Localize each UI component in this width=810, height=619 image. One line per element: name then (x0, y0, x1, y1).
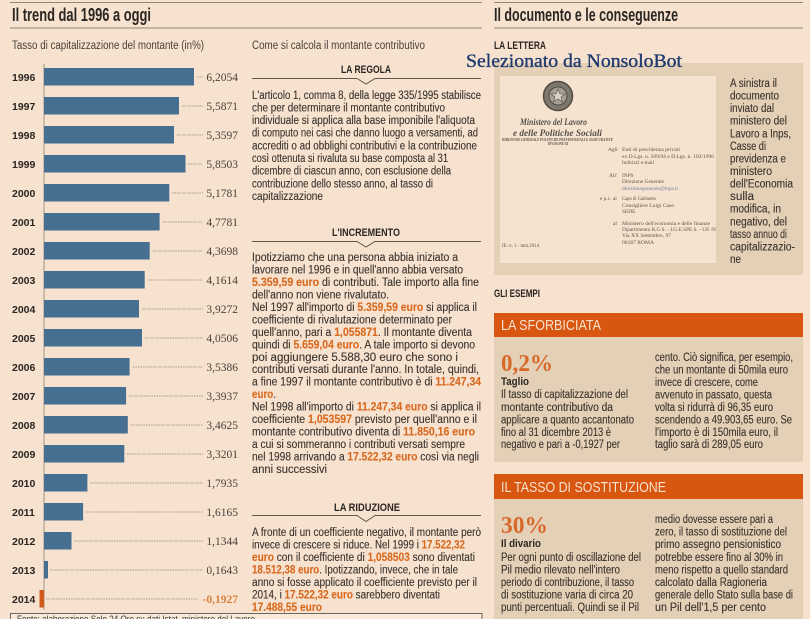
text: l'incremento: lavorare nel 1996 e in quell'anno abbia versato (252, 264, 463, 276)
addressees: IE: n. 1 - mm.2014 (502, 243, 539, 249)
bar 2010 (12, 474, 238, 492)
text: column 1 (501, 552, 641, 614)
addressees: Consigliere Luigi Caso (622, 203, 674, 209)
text: la riduzione: invece di crescere si riduce. Nel 1999 i 17.522,32 (252, 540, 465, 552)
number: 0,2%: 0,2% (501, 351, 553, 377)
bar 2012: 1,1344 (206, 536, 238, 548)
section: la riduzione (252, 502, 481, 614)
bar 2004 (12, 300, 238, 318)
text: la riduzione: 18.512,38 euro. Ipotizzando, invece, che in tale (252, 564, 458, 576)
text: letter caption: negativo, del (730, 216, 787, 228)
addressees: Via XX Settembre, 97 (622, 233, 671, 239)
text: letter caption (730, 78, 795, 266)
bar 1996: 6,2054 (206, 72, 238, 84)
addressees: e p.c. al (600, 196, 617, 202)
panel: il tasso di sostituzione (494, 474, 803, 619)
text: column 1: negativo e pari a -0,1927 per (501, 439, 620, 451)
text: column 2: taglio sarà di 289,05 euro (655, 439, 763, 451)
text: column 2: l'importo è di 150mila euro, il (655, 427, 778, 439)
text: la regola (252, 90, 481, 203)
bar 2010: 1,7935 (206, 478, 238, 490)
text: column 2: primo assegno pensionistico (655, 539, 781, 551)
label: gli esempi: GLI ESEMPI (494, 288, 540, 300)
heading: l'incremento: L'INCREMENTO (332, 227, 400, 239)
text: column 2: zero, il tasso di sostituzione del (655, 527, 787, 539)
letterhead: DIREZIONE GENERALE POLITICHE PREVIDENZIALI E ASSICURATIVE (502, 138, 613, 142)
bar 2006: 2006 (12, 362, 36, 374)
text: column 1: periodo di contribuzione, il tasso (501, 577, 634, 589)
banner: il tasso di sostituzione: IL TASSO DI SOSTITUZIONE (501, 479, 666, 496)
heading: trend: Il trend dal 1996 a oggi (12, 5, 151, 25)
text: l'incremento: quindi di 5.659,04 euro. A tale importo si devono (252, 339, 475, 351)
letterhead (502, 118, 613, 146)
bar 1999: 5,8503 (206, 159, 238, 171)
heading: la riduzione: LA RIDUZIONE (334, 502, 400, 514)
text: column 1: fino al 31 dicembre 2013 è (501, 427, 611, 439)
bar 2007 (12, 387, 238, 404)
text: l'incremento: montante contributivo diventa di 11.850,16 euro (252, 427, 475, 439)
text: column 1 (501, 389, 634, 451)
bar 1998: 5,3597 (206, 130, 238, 142)
bar 1997 (12, 97, 238, 114)
bar 2006 (12, 358, 238, 376)
addressees: Dipartimento R.G.S. - I.G.E.SPE.S. - UE /N (622, 227, 716, 233)
bar 2000 (12, 184, 238, 202)
banner: il tasso di sostituzione (494, 474, 803, 499)
banner: la sforbiciata: LA SFORBICIATA (501, 317, 601, 334)
banner: la sforbiciata (494, 313, 803, 337)
document image (500, 76, 716, 263)
text: column 1: Pil medio rilevato nell'intero (501, 564, 620, 576)
text: l'incremento: Nel 1998 all'importo di 11.247,34 euro si applica il (252, 402, 481, 414)
text: letter caption: dell'Economia (730, 179, 794, 191)
addressees: Ministero dell'economia e delle finanze (622, 220, 711, 227)
bar 2011: 2011 (12, 507, 35, 519)
text: column 1: punti percentuali. Quindi se il Pil (501, 602, 639, 614)
bar 2013 (12, 561, 238, 578)
text: column 1: Per ogni punto di oscillazione del (501, 552, 641, 564)
bar 2001 (12, 213, 238, 230)
bar 2005: 4,0506 (206, 333, 238, 345)
bar 1999 (12, 155, 238, 172)
text: letter caption: tasso annuo di (730, 229, 787, 241)
label: taglio: Taglio (501, 376, 529, 388)
bar 2002 (12, 242, 238, 260)
bar 2009: 2009 (12, 449, 36, 461)
text: la regola: di computo nei casi che danno luogo a versamenti, ad (252, 128, 478, 140)
text: letter caption: modifica, in (730, 204, 781, 216)
text: letter caption: documento (730, 91, 779, 103)
panel: la sforbiciata (494, 313, 803, 462)
text: column 1: di sostituzione varia di circa 20 (501, 590, 633, 602)
addressees: ex D.Lgs. n. 509/94 e D.Lgs. n. 103/1996 (622, 154, 714, 160)
text: la riduzione (252, 527, 481, 614)
bar 2003: 2003 (12, 275, 36, 287)
bar 2013: 2013 (12, 565, 36, 577)
text: l'incremento: nel 1998 arrivando a 17.522,32 euro così via negli (252, 452, 479, 464)
bar 2009 (12, 445, 238, 462)
text: letter caption: capitalizzazio- (730, 241, 795, 253)
text: column 1: Il tasso di capitalizzazione del (501, 389, 628, 401)
text: la regola: contribuzione dello stesso anno, al tasso di (252, 178, 433, 190)
bar chart (12, 64, 238, 610)
text: letter caption: ministero del (730, 116, 787, 128)
text: column 2: un Pil dell'1,5 per cento (655, 602, 766, 614)
text: column 2: avvenuto in passato, questa (655, 390, 772, 402)
bar 2005: 2005 (12, 333, 36, 345)
addressees: 00187 ROMA (622, 240, 654, 246)
addressees: Indirizzi e-mail (622, 160, 654, 166)
text: l'incremento: Nel 1997 all'importo di 5.359,59 euro si applica il (252, 302, 477, 314)
label: il divario: Il divario (501, 538, 541, 550)
bar 1999: 1999 (12, 159, 36, 171)
label: la lettera: LA LETTERA (494, 40, 546, 52)
text: la regola: così ottenuta si rivaluta su base composta al 31 (252, 153, 448, 165)
panel: la lettera (494, 63, 803, 275)
text: letter caption: ne (730, 254, 741, 266)
letterhead: DIVISIONE III (548, 142, 568, 146)
text: la regola: che per determinare il montante contributivo (252, 102, 445, 114)
bar 2006: 3,5386 (206, 362, 238, 374)
addressees: SEDE (622, 209, 636, 215)
bar 1996: 1996 (12, 72, 36, 84)
text: letter caption: previdenza e (730, 153, 786, 165)
text: la riduzione: 2014, i 17.522,32 euro sarebbero diventati (252, 590, 440, 602)
icon: crest (544, 82, 572, 110)
bar 2011: 1,6165 (206, 507, 238, 519)
text: la regola: individuale si applica alla base imponibile l'aliquota (252, 115, 476, 127)
addressees: direzionegenerale@inps.it (622, 186, 678, 192)
bar 1996 (12, 68, 238, 86)
bar 2011 (12, 503, 238, 520)
bar 1998: 1998 (12, 130, 36, 142)
bar 2000: 2000 (12, 188, 36, 200)
text: l'incremento: a cui si sommeranno i contributi versati sempre (252, 439, 465, 451)
addressees: al (613, 221, 617, 227)
addressees: Enti di previdenza privati (622, 147, 681, 153)
text: column 2 (655, 514, 793, 614)
text: l'incremento (252, 252, 482, 476)
text: letter caption: Casse di (730, 141, 766, 153)
text: l'incremento: coefficiente 1,053597 previsto per quell'anno e il (252, 414, 477, 426)
text: l'incremento: contributi versati durante l'anno. In totale, quindi, (252, 364, 479, 376)
bar 2010: 2010 (12, 478, 36, 490)
text: la riduzione: euro con il coefficiente di 1,058503 sono diventati (252, 552, 475, 564)
bar 2005 (12, 329, 238, 346)
bar 2014: -0,1927 (203, 594, 238, 606)
text: l'incremento: anni successivi (252, 464, 327, 476)
source box (10, 614, 482, 619)
addressees: Direzione Generale (622, 179, 665, 185)
bar 2000: 5,1781 (206, 188, 238, 200)
bar 2007: 3,3937 (206, 391, 238, 403)
bar 2007: 2007 (12, 391, 36, 403)
addressees: INPS (622, 173, 634, 179)
addressees (502, 147, 716, 249)
text: l'incremento: a fine 1997 il montante contributivo è di 11.247,34 (252, 377, 482, 389)
text: column 2: calcolato dalla Ragioneria (655, 577, 768, 589)
text: column 1: applicare a quanto accantonato (501, 414, 634, 426)
text: l'incremento: dell'anno non viene rivalutato. (252, 289, 389, 301)
text: la regola: L'articolo 1, comma 8, della legge 335/1995 stabilisce (252, 90, 481, 102)
letterhead: Ministero del Lavoro (519, 118, 587, 128)
bar 2002: 2002 (12, 246, 36, 258)
chart subtitle: Tasso di capitalizzazione del montante (in%) (12, 40, 204, 52)
bar 2013: 0,1643 (206, 565, 238, 577)
section: l'incremento (252, 227, 482, 476)
text: l'incremento: Ipotizziamo che una persona abbia iniziato a (252, 252, 459, 264)
text: column 2: invece di crescere, come (655, 377, 758, 389)
text: la riduzione: A fronte di un coefficiente negativo, il montante però (252, 527, 481, 539)
bar 2001: 4,7781 (206, 217, 238, 229)
heading: la regola: LA REGOLA (341, 64, 391, 76)
bar 2004: 3,9272 (206, 304, 238, 316)
bar 2008: 3,4625 (206, 420, 238, 432)
number: 30%: 30% (501, 513, 548, 539)
bar 2008 (12, 416, 238, 434)
text: letter caption: A sinistra il (730, 78, 777, 90)
text: letter caption: sulla (730, 191, 755, 203)
text: l'incremento: poi aggiungere 5.588,30 euro che sono i (252, 352, 458, 364)
text: la riduzione: 17.488,55 euro (252, 602, 322, 614)
bar 2008: 2008 (12, 420, 36, 432)
bar 2001: 2001 (12, 217, 36, 229)
text: l'incremento: 5.359,59 euro di contributi. Tale importo alla fine (252, 277, 479, 289)
bar 1998 (12, 126, 238, 144)
text: la riduzione: anno si fosse applicato il coefficiente previsto per il (252, 577, 477, 589)
text: column 2 (655, 352, 793, 451)
text: letter caption: ministero (730, 166, 772, 178)
text: l'incremento: coefficiente di rivalutazione determinato per (252, 314, 452, 326)
text: column 2: potrebbe essere fino al 30% in (655, 552, 783, 564)
bar 2012: 2012 (12, 536, 36, 548)
letterhead: e delle Politiche Sociali (513, 129, 602, 139)
bar 2009: 3,3201 (206, 449, 238, 461)
text: column 2: volta si ridurrà di 96,35 euro (655, 402, 773, 414)
bar 2014 (12, 590, 238, 608)
bar 2003: 4,1614 (206, 275, 238, 287)
section: la regola (252, 64, 481, 203)
addressees: Agli (608, 147, 618, 153)
text: column 2: medio dovesse essere pari a (655, 514, 773, 526)
text: la regola: capitalizzazione (252, 191, 323, 203)
text: letter caption: inviato dal (730, 103, 774, 115)
column subtitle: Come si calcola il montante contributivo (252, 40, 425, 52)
bar 2003 (12, 271, 238, 288)
bar 1997: 5,5871 (206, 101, 238, 113)
watermark: Selezionato da NonsoloBot (466, 52, 683, 72)
text: la regola: dicembre di ciascun anno, con esclusione della (252, 166, 451, 178)
text: la regola: accrediti o ad obblighi contributivi e la contribuzione (252, 140, 477, 152)
text: l'incremento: quell'anno, pari a 1,055871. Il montante diventa (252, 327, 473, 339)
bar 1997: 1997 (12, 101, 36, 113)
bar 2014: 2014 (12, 594, 36, 606)
addressees: Capo di Gabinetto (622, 196, 656, 202)
bar 2004: 2004 (12, 304, 36, 316)
text: letter caption: Lavoro a Inps, (730, 128, 791, 140)
heading: documento: Il documento e le conseguenze (494, 5, 678, 25)
text: column 1: montante contributivo da (501, 402, 614, 414)
bar 2002: 4,3698 (206, 246, 238, 258)
text: l'incremento: euro. (252, 389, 276, 401)
bar 2012 (12, 532, 238, 550)
addressees: All' (609, 173, 617, 179)
